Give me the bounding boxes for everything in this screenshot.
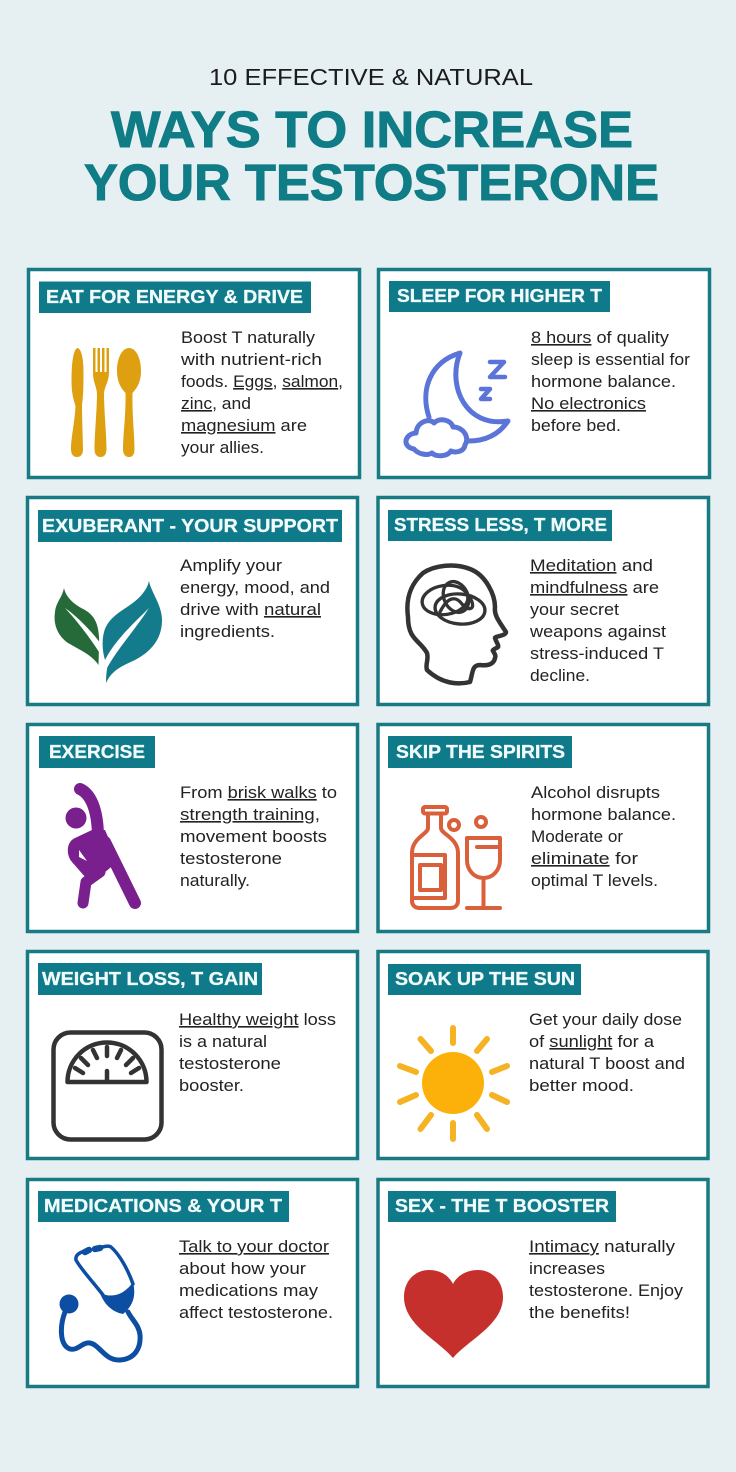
heading: exuberant: EXUBERANT - YOUR SUPPORT bbox=[42, 516, 338, 536]
panel: exercise bbox=[28, 724, 358, 932]
heading: exercise bbox=[39, 736, 155, 768]
body text: sleep: No electronics bbox=[531, 395, 646, 413]
body text: stress: mindfulness are bbox=[530, 579, 659, 597]
body text: exuberant: energy, mood, and bbox=[180, 579, 330, 597]
body text: sleep: before bed. bbox=[531, 417, 621, 435]
body text: exuberant: drive with natural bbox=[180, 601, 321, 619]
body text: t booster: Intimacy naturally bbox=[529, 1238, 676, 1256]
body text: eat for energy: your allies. bbox=[181, 439, 264, 457]
heading: weight loss: WEIGHT LOSS, T GAIN bbox=[42, 969, 258, 989]
panel: skip the spirits bbox=[378, 724, 708, 932]
body text: sun bbox=[529, 1011, 685, 1095]
heading: sleep bbox=[389, 281, 610, 312]
heading: sleep: SLEEP FOR HIGHER T bbox=[397, 286, 602, 306]
body text: exercise: testosterone bbox=[180, 850, 282, 868]
body text: sun: of sunlight for a bbox=[529, 1033, 654, 1051]
body text: spirits: eliminate for bbox=[531, 850, 639, 868]
heading: stress: STRESS LESS, T MORE bbox=[394, 515, 607, 535]
body text: medications bbox=[179, 1238, 333, 1322]
body text: weight loss bbox=[179, 1011, 336, 1095]
body text: t booster: the benefits! bbox=[529, 1304, 630, 1322]
body text: sun: better mood. bbox=[529, 1077, 634, 1095]
heading: medications: MEDICATIONS & YOUR T bbox=[44, 1196, 282, 1216]
body text: medications: Talk to your doctor bbox=[179, 1238, 330, 1256]
panel: exuberant bbox=[28, 498, 358, 704]
main heading: WAYS TO INCREASE bbox=[111, 101, 633, 158]
body text: exercise: movement boosts bbox=[180, 828, 327, 846]
heading: sun: SOAK UP THE SUN bbox=[395, 969, 575, 989]
body text: exercise: strength training , bbox=[180, 806, 320, 824]
body text: stress: your secret bbox=[530, 601, 620, 619]
body text: sleep: 8 hours of quality bbox=[531, 329, 670, 347]
body text: t booster bbox=[529, 1238, 684, 1322]
heading: exuberant bbox=[38, 510, 342, 542]
body text: exercise: naturally. bbox=[180, 872, 250, 890]
body text: exercise: From brisk walks to bbox=[180, 784, 337, 802]
icon: two leaves bbox=[55, 581, 162, 683]
body text: sleep bbox=[531, 329, 691, 435]
body text: sleep: sleep is essential for bbox=[531, 351, 691, 369]
icon: moon and cloud bbox=[406, 353, 508, 456]
body text: eat for energy: with nutrient-rich bbox=[180, 351, 322, 369]
panel: medications bbox=[28, 1180, 358, 1386]
body text: weight loss: Healthy weight loss bbox=[179, 1011, 336, 1029]
body text: eat for energy: Boost T naturally bbox=[181, 329, 316, 347]
body text: exuberant: ingredients. bbox=[180, 623, 275, 641]
body text: spirits: Alcohol disrupts bbox=[531, 784, 660, 802]
heading: t booster: SEX - THE T BOOSTER bbox=[395, 1196, 609, 1216]
heading: weight loss bbox=[38, 963, 262, 995]
heading: exercise: EXERCISE bbox=[49, 742, 145, 762]
body text: medications: affect testosterone. bbox=[179, 1304, 333, 1322]
body text: stress: decline. bbox=[530, 667, 590, 685]
body text: eat for energy bbox=[180, 329, 343, 457]
body text: sun: natural T boost and bbox=[529, 1055, 685, 1073]
body text: exuberant: Amplify your bbox=[180, 557, 283, 575]
panel: eat for energy and drive bbox=[28, 270, 360, 478]
body text: t booster: testosterone. Enjoy bbox=[529, 1282, 684, 1300]
heading: sun bbox=[388, 964, 581, 995]
body text: eat for energy: magnesium are bbox=[181, 417, 307, 435]
body text: stress: stress-induced T bbox=[530, 645, 664, 663]
icon: stretching figure bbox=[66, 789, 135, 903]
icon: bottle and glass bbox=[412, 807, 500, 908]
body text: spirits bbox=[531, 784, 676, 890]
body text: t booster: increases bbox=[529, 1260, 605, 1278]
body text: medications: medications may bbox=[179, 1282, 319, 1300]
heading: t booster bbox=[388, 1191, 616, 1222]
icon: head with tangled thoughts bbox=[407, 566, 506, 683]
heading: stress bbox=[388, 510, 612, 541]
body text: exuberant bbox=[180, 557, 330, 641]
main heading: YOUR TESTOSTERONE bbox=[84, 154, 659, 211]
body text: sun: Get your daily dose bbox=[529, 1011, 682, 1029]
panel: soak up the sun bbox=[378, 952, 708, 1158]
body text: spirits: Moderate or bbox=[531, 828, 624, 846]
icon: weighing scale bbox=[54, 1032, 162, 1140]
icon: stethoscope bbox=[60, 1246, 140, 1360]
heading: eat for energy: EAT FOR ENERGY & DRIVE bbox=[46, 287, 303, 307]
body text: spirits: hormone balance. bbox=[531, 806, 676, 824]
body text: stress: Meditation and bbox=[530, 557, 653, 575]
panel: weight loss bbox=[28, 952, 358, 1158]
body text: spirits: optimal T levels. bbox=[531, 872, 658, 890]
body text: stress bbox=[529, 557, 667, 685]
heading: spirits bbox=[388, 736, 572, 768]
body text: weight loss: is a natural bbox=[179, 1033, 267, 1051]
heading: medications bbox=[38, 1191, 289, 1222]
body text: weight loss: booster. bbox=[179, 1077, 244, 1095]
icon: heart bbox=[404, 1270, 503, 1358]
main heading bbox=[84, 101, 659, 211]
body text: weight loss: testosterone bbox=[179, 1055, 281, 1073]
icon: cutlery bbox=[71, 348, 141, 457]
body text: stress: weapons against bbox=[529, 623, 667, 641]
icon: sun bbox=[400, 1028, 507, 1139]
panel: sleep for higher t bbox=[378, 270, 710, 478]
body text: sleep: hormone balance. bbox=[531, 373, 676, 391]
body text: exercise bbox=[180, 784, 337, 890]
heading: eat for energy bbox=[39, 282, 311, 313]
title bbox=[84, 64, 659, 211]
panel: stress less bbox=[378, 498, 708, 704]
body text: eat for energy: zinc, and bbox=[181, 395, 251, 413]
body text: medications: about how your bbox=[179, 1260, 307, 1278]
body text: eat for energy: foods. Eggs, salmon, bbox=[181, 373, 343, 391]
panel: sex the t booster bbox=[378, 1180, 708, 1386]
heading: spirits: SKIP THE SPIRITS bbox=[396, 742, 565, 762]
subtitle: 10 EFFECTIVE & NATURAL bbox=[209, 64, 533, 90]
